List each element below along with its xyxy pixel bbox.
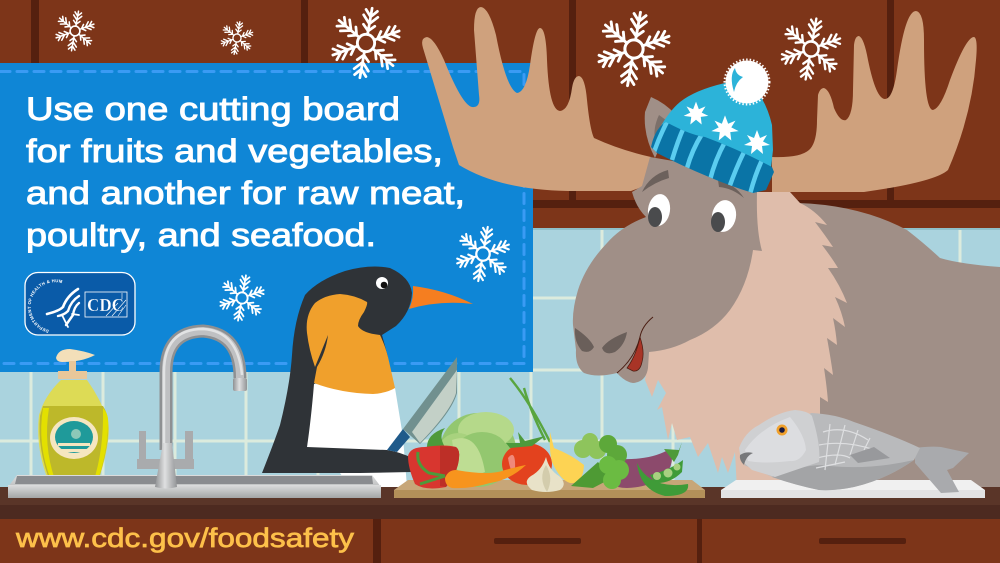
penguin belly (307, 384, 407, 487)
penguin orange chest (307, 294, 395, 394)
bottle (38, 380, 109, 488)
snowflake (330, 7, 402, 79)
HHS eagle (47, 289, 79, 327)
heading: for fruits and vegetables, (26, 133, 443, 169)
handles (137, 431, 194, 469)
fish tail (915, 447, 969, 493)
fish mouth (740, 452, 753, 465)
tiled wall (0, 228, 1000, 490)
nostrils (575, 328, 627, 353)
moose head (573, 157, 762, 383)
fish face highlight (745, 417, 806, 462)
faucet (137, 329, 247, 488)
pump neck (69, 361, 76, 372)
hat band (651, 122, 774, 193)
eggplant (618, 442, 682, 488)
fish scales (816, 424, 875, 470)
knife (387, 357, 457, 452)
spout (166, 331, 240, 450)
left antler (422, 7, 651, 191)
hat pom-pom (724, 60, 770, 104)
moose body (798, 203, 1000, 490)
heading: and another for raw meat, (26, 175, 465, 211)
red pepper (408, 428, 459, 488)
hat snowflake (711, 115, 739, 141)
snowflake (219, 275, 265, 321)
pump collar (58, 371, 87, 379)
tomato (502, 432, 552, 485)
scallion (510, 378, 550, 442)
right eye (709, 198, 739, 234)
ear (645, 97, 675, 158)
vegetable cutting board (394, 480, 705, 498)
HHS and CDC logo (24, 272, 136, 336)
sink (8, 475, 381, 498)
mouth and tongue (617, 317, 653, 373)
snowflake (596, 11, 672, 87)
snowflake (220, 21, 254, 55)
right antler (772, 11, 977, 192)
hat crown (657, 80, 773, 168)
pea pod (637, 460, 688, 496)
pump head (56, 349, 95, 362)
lower counter and cabinets (0, 487, 1000, 563)
heading: poultry, and seafood. (26, 217, 376, 253)
aerator (233, 378, 247, 391)
broccoli (571, 433, 629, 489)
mane and beard (645, 192, 847, 490)
left eye (646, 193, 672, 227)
vegetables (408, 378, 688, 496)
bottle highlight (41, 408, 108, 483)
right brow (718, 180, 744, 198)
soap dispenser (38, 349, 109, 488)
fish fin (850, 447, 890, 463)
heading (26, 91, 465, 253)
fish (739, 410, 969, 493)
penguin (262, 267, 473, 487)
snowflake (455, 226, 511, 282)
faucet base (155, 443, 177, 488)
inner ear (654, 115, 670, 147)
fish belly (772, 460, 914, 490)
upper cabinets (0, 0, 1000, 228)
fish head (739, 410, 819, 477)
snowflake (55, 11, 95, 51)
hat snowflake (684, 102, 708, 124)
left brow (642, 170, 669, 192)
fish body (744, 413, 920, 490)
garlic (527, 457, 564, 492)
heading: Use one cutting board (26, 91, 400, 127)
yellow squash (550, 432, 584, 483)
penguin beak (409, 286, 473, 309)
penguin eye (376, 277, 388, 289)
website address: www.cdc.gov/foodsafety (15, 523, 355, 553)
moose (422, 7, 1000, 490)
blue message panel (0, 63, 533, 372)
snowflake (780, 18, 842, 80)
carrot (445, 465, 526, 488)
soap liquid (39, 406, 108, 487)
fish eye (776, 424, 788, 436)
winter hat (651, 60, 774, 194)
cabbage (439, 412, 516, 487)
hat band stripes (654, 120, 762, 194)
hat snowflake (744, 130, 770, 154)
penguin black body and arm (262, 267, 412, 473)
soap label (50, 417, 98, 459)
CDC mark: CDC (87, 295, 124, 315)
fish cutting board (721, 480, 985, 498)
